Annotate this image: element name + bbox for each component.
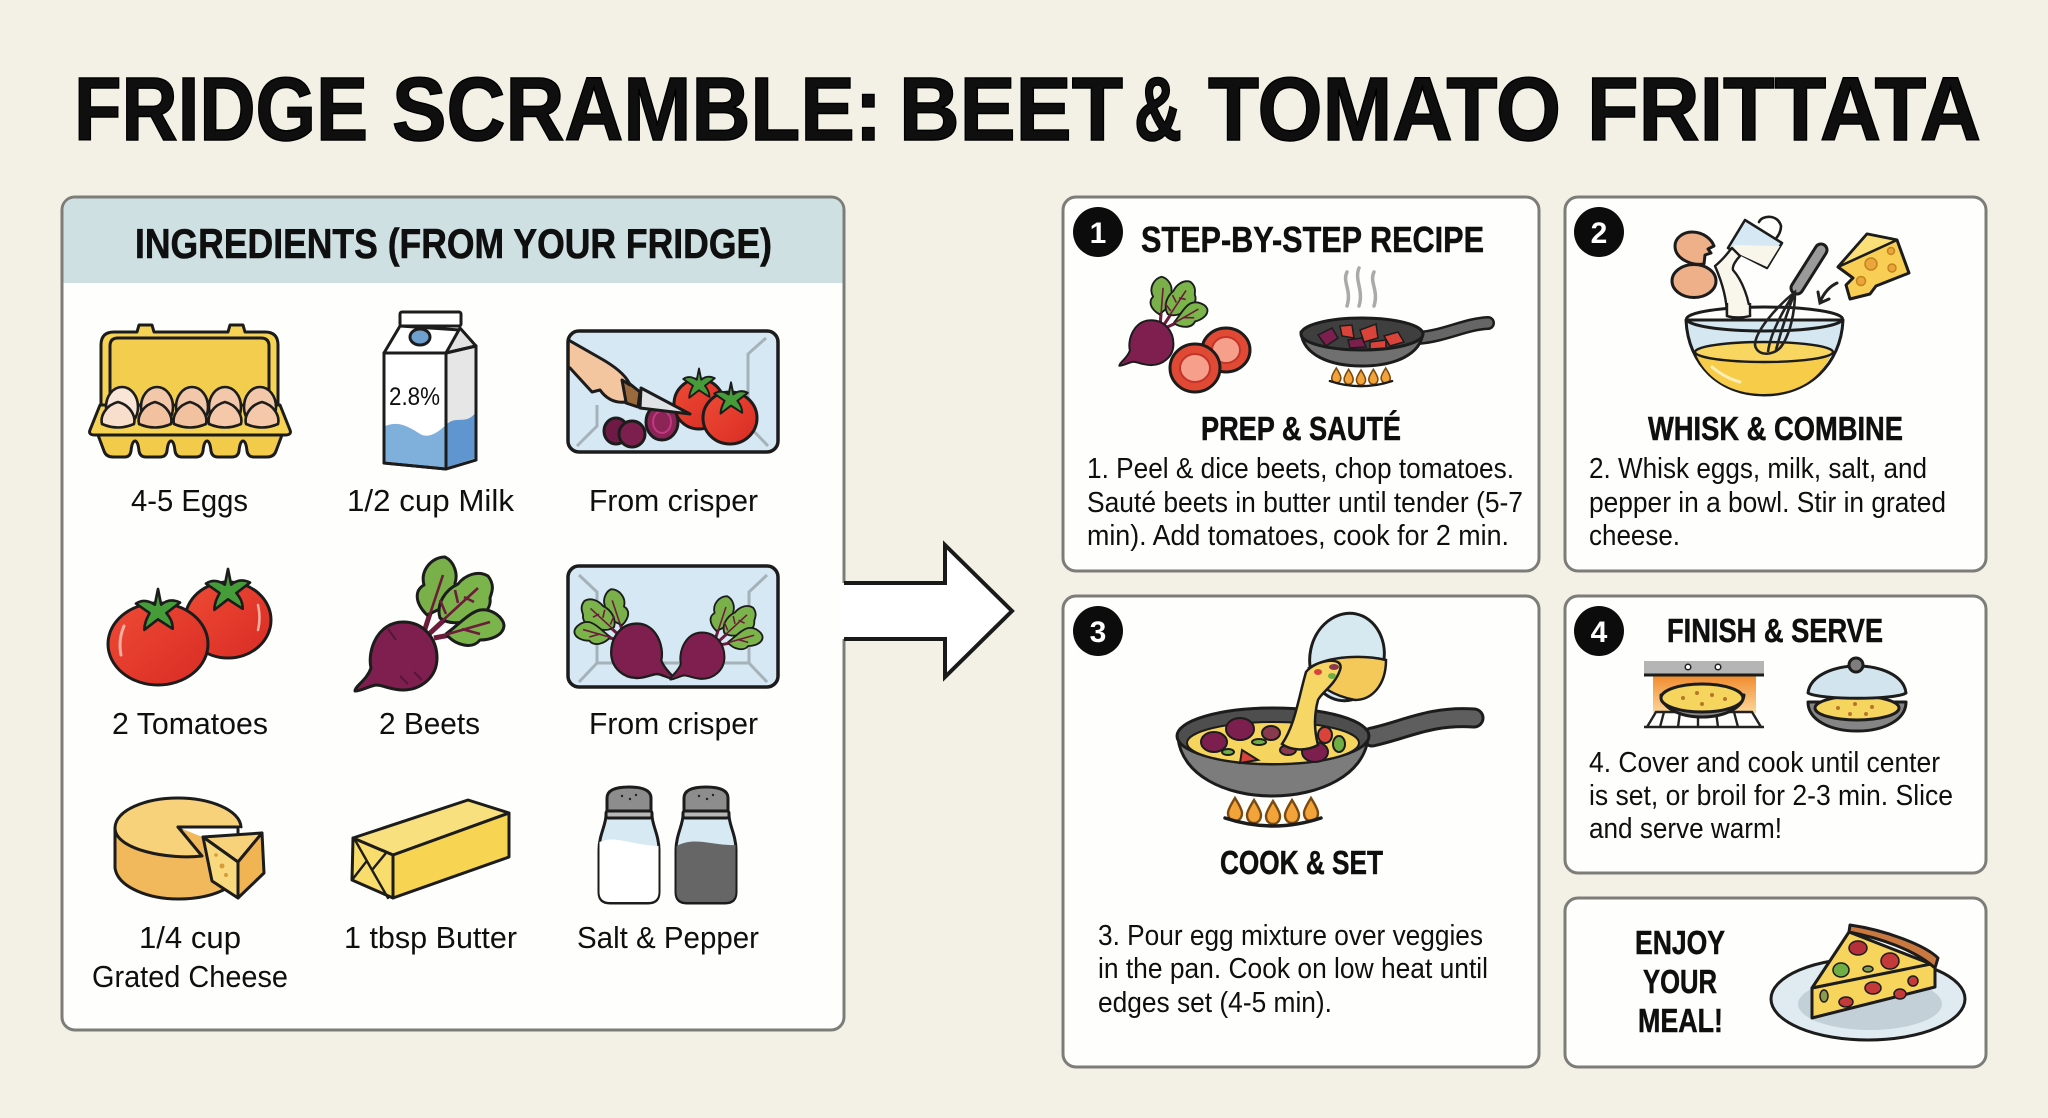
- panel: enjoy: [1565, 898, 1986, 1067]
- step 4 heading: FINISH & SERVE: [1667, 612, 1883, 649]
- badge 3: 3: [1090, 616, 1106, 649]
- icon: broiler with pan: [1644, 661, 1764, 727]
- step 1 text: Sauté beets in butter until tender (5-7: [1087, 487, 1523, 519]
- step 1 text: [1087, 453, 1523, 552]
- title: BEET: [899, 60, 1123, 160]
- label: grated cheese: Grated Cheese: [92, 959, 288, 994]
- panel: step 4: [1565, 596, 1986, 873]
- step 3 text: in the pan. Cook on low heat until: [1098, 953, 1488, 985]
- icon: beet and tomato slices: [1119, 268, 1250, 392]
- enjoy text: YOUR: [1643, 963, 1717, 1000]
- title: [74, 60, 1981, 160]
- enjoy text: MEAL!: [1638, 1002, 1723, 1039]
- title: FRITTATA: [1587, 60, 1981, 160]
- arrow: [840, 545, 1012, 677]
- step 4 text: and serve warm!: [1589, 813, 1782, 845]
- badge 3: [1073, 606, 1123, 656]
- label: salt and pepper: Salt & Pepper: [577, 920, 759, 955]
- icon: milk jug and stream: [1715, 217, 1782, 318]
- step 2 text: cheese.: [1589, 520, 1680, 552]
- step 2 subheading: WHISK & COMBINE: [1648, 410, 1903, 447]
- step 1 heading: STEP-BY-STEP RECIPE: [1141, 219, 1484, 260]
- icon: bowl with whisk: [1686, 250, 1843, 395]
- label: butter: 1 tbsp Butter: [344, 920, 517, 955]
- badge 1: 1: [1090, 217, 1106, 250]
- step 2 text: 2. Whisk eggs, milk, salt, and: [1589, 453, 1927, 485]
- label: crisper: From crisper: [589, 706, 758, 741]
- panel: ingredients: [62, 197, 844, 1030]
- icon: tomatoes: [108, 569, 271, 685]
- step 1 text: 1. Peel & dice beets, chop tomatoes.: [1087, 453, 1514, 485]
- step 1 text: min). Add tomatoes, cook for 2 min.: [1087, 520, 1509, 552]
- icon: beet: [355, 557, 504, 691]
- panel: step 3: [1063, 596, 1539, 1067]
- icon: covered pan: [1808, 658, 1906, 731]
- icon: milk carton: [384, 312, 476, 469]
- icon: salt shaker: [599, 787, 659, 903]
- ingredients heading: INGREDIENTS (FROM YOUR FRIDGE): [135, 220, 772, 267]
- arrow: cheese into bowl: [1818, 283, 1837, 303]
- icon: pan on burner: [1301, 268, 1488, 386]
- step 3 text: edges set (4-5 min).: [1098, 987, 1332, 1019]
- panel: step 2: [1565, 197, 1986, 571]
- icon: crisper with beets: [568, 566, 778, 687]
- step 3 subheading: COOK & SET: [1220, 844, 1383, 881]
- badge 2: [1574, 207, 1624, 257]
- label: milk: 1/2 cup Milk: [347, 483, 514, 518]
- badge 1: [1073, 207, 1123, 257]
- label: crisper: From crisper: [589, 483, 758, 518]
- icon: crisper with hand chopping: [565, 331, 778, 452]
- icon: pan with burner and pouring bowl: [1177, 606, 1474, 826]
- step 2 text: [1589, 453, 1946, 552]
- milk fat percentage: 2.8%: [389, 383, 440, 411]
- icon: cheese wedge: [1838, 234, 1909, 299]
- step 3 text: [1098, 920, 1488, 1019]
- label: beets: 2 Beets: [379, 706, 480, 741]
- step 4 text: is set, or broil for 2-3 min. Slice: [1589, 780, 1953, 812]
- icon: egg carton: [90, 325, 290, 457]
- enjoy text: [1635, 924, 1725, 1039]
- step 2 text: pepper in a bowl. Stir in grated: [1589, 487, 1946, 519]
- badge 4: 4: [1591, 616, 1608, 649]
- label: tomatoes: 2 Tomatoes: [112, 706, 268, 741]
- title: SCRAMBLE:: [392, 60, 882, 160]
- icon: butter: [352, 800, 509, 898]
- label: cheese: 1/4 cup: [139, 920, 241, 955]
- title: &: [1134, 60, 1182, 160]
- step 1 subheading: PREP & SAUTÉ: [1201, 410, 1401, 447]
- panel: step 1: [1063, 197, 1539, 571]
- badge 4: [1574, 606, 1624, 656]
- step 4 text: [1589, 747, 1953, 845]
- label: eggs: 4-5 Eggs: [131, 483, 248, 518]
- enjoy text: ENJOY: [1635, 924, 1725, 961]
- icon: frittata slice on plate: [1771, 925, 1965, 1040]
- icon: pepper shaker: [676, 787, 736, 903]
- title: FRIDGE: [74, 60, 368, 160]
- step 4 text: 4. Cover and cook until center: [1589, 747, 1940, 779]
- step 3 text: 3. Pour egg mixture over veggies: [1098, 920, 1483, 952]
- icon: eggs: [1672, 232, 1716, 298]
- badge 2: 2: [1591, 217, 1607, 250]
- ingredients header band: [64, 198, 842, 283]
- title: TOMATO: [1208, 60, 1561, 160]
- icon: cheese: [115, 798, 264, 899]
